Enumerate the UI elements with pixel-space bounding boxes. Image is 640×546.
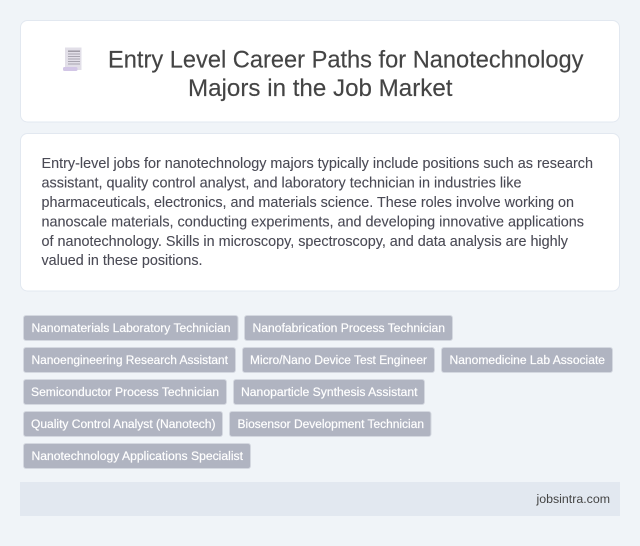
- panel: header card: [20, 20, 620, 122]
- tag: Nanomaterials Laboratory Technician: Nanomaterials Laboratory Technician: [32, 321, 230, 335]
- tag: Biosensor Development Technician: [230, 412, 431, 436]
- title: [108, 46, 584, 102]
- text block: description: nanoscale materials, conducting experiments, and developing innovative applications: [42, 214, 584, 230]
- text block: description: pharmaceuticals, electronics, and materials science. These roles involve working on: [42, 195, 574, 211]
- text block: description: of nanotechnology. Skills in microscopy, spectroscopy, and data analysis are highly: [42, 234, 569, 250]
- panel: job title tags: [24, 316, 612, 468]
- tag: Quality Control Analyst (Nanotech): [24, 412, 222, 436]
- footer source text: jobsintra.com: [535, 492, 610, 506]
- tag: Micro/Nano Device Test Engineer: [242, 348, 434, 372]
- text block: description: [42, 156, 593, 269]
- tag: Micro/Nano Device Test Engineer: Micro/Nano Device Test Engineer: [250, 353, 427, 367]
- tag: Nanotechnology Applications Specialist: [24, 444, 250, 468]
- text block: description: assistant, quality control analyst, and laboratory technician in industries like: [42, 176, 522, 192]
- tag: Nanofabrication Process Technician: [244, 316, 452, 340]
- title: Entry Level Career Paths for Nanotechnology: [108, 46, 584, 74]
- panel: description card: [20, 134, 620, 291]
- tag: Nanoengineering Research Assistant: Nanoengineering Research Assistant: [32, 353, 229, 367]
- tag: Nanomedicine Lab Associate: [442, 348, 612, 372]
- tag: Nanomedicine Lab Associate: Nanomedicine Lab Associate: [450, 353, 605, 367]
- text block: description: valued in these positions.: [42, 253, 202, 269]
- title: Majors in the Job Market: [188, 75, 453, 102]
- tag: Nanomaterials Laboratory Technician: [24, 316, 238, 340]
- tag: Nanofabrication Process Technician: Nanofabrication Process Technician: [252, 321, 445, 335]
- icon: document scroll: [63, 48, 82, 71]
- footer bar: [20, 482, 620, 516]
- tag: Nanoparticle Synthesis Assistant: Nanoparticle Synthesis Assistant: [241, 385, 418, 399]
- tag: Nanotechnology Applications Specialist: Nanotechnology Applications Specialist: [32, 449, 244, 463]
- tag: Nanoengineering Research Assistant: [24, 348, 236, 372]
- tag: Biosensor Development Technician: Biosensor Development Technician: [238, 417, 424, 431]
- text block: description: Entry-level jobs for nanotechnology majors typically include positions such as research: [42, 156, 593, 172]
- tag: Quality Control Analyst (Nanotech): Quality Control Analyst (Nanotech): [31, 417, 216, 431]
- tag: Nanoparticle Synthesis Assistant: [234, 380, 424, 404]
- tag: Semiconductor Process Technician: Semiconductor Process Technician: [31, 385, 219, 399]
- tag: Semiconductor Process Technician: [24, 380, 226, 404]
